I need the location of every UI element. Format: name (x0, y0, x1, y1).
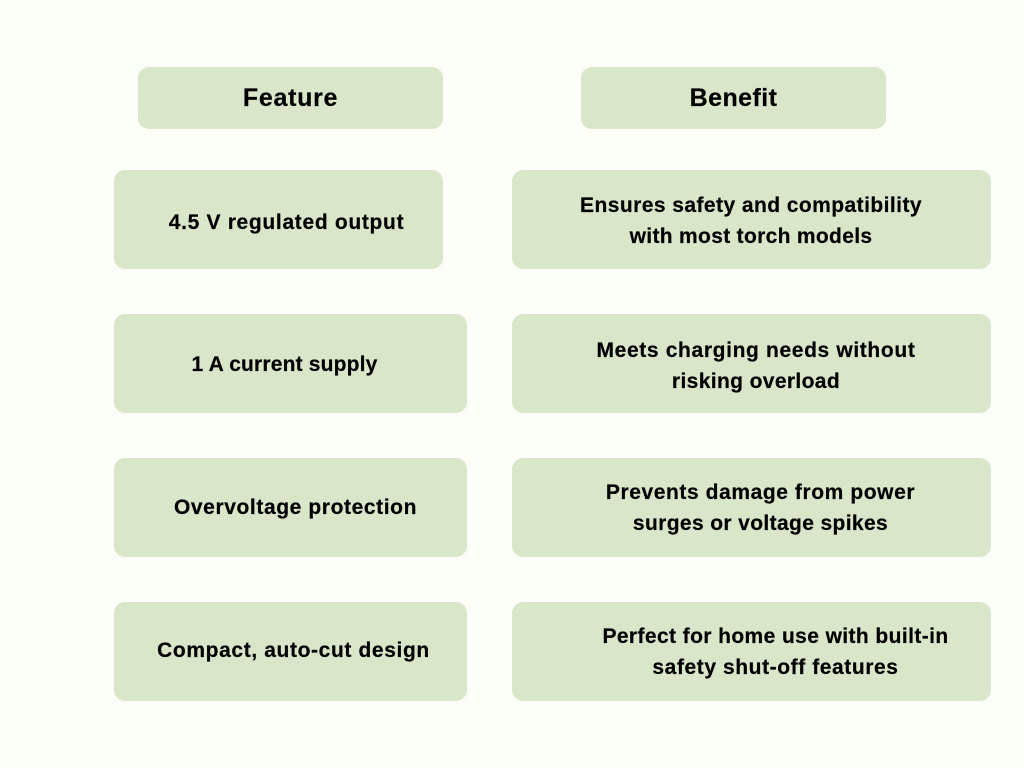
panel: benefit 2 (512, 314, 991, 413)
heading: benefit: Benefit (690, 84, 777, 112)
panel: benefit header (581, 67, 886, 129)
panel: benefit 4 (512, 602, 991, 701)
text: benefit 4: safety shut-off features (652, 656, 899, 679)
text: benefit 3 (606, 481, 915, 535)
text: benefit 2: Meets charging needs without (597, 339, 915, 362)
text: feature 4: Compact, auto-cut design (157, 639, 430, 662)
text: feature 3: Overvoltage protection (174, 496, 417, 519)
text: benefit 1 (580, 194, 922, 248)
text: benefit 3: Prevents damage from power (606, 481, 915, 504)
text: benefit 4: Perfect for home use with built-in (602, 625, 949, 648)
panel: feature header (138, 67, 443, 129)
text: feature 1: 4.5 V regulated output (169, 211, 404, 234)
panel: feature 4 (114, 602, 467, 701)
panel: benefit 1 (512, 170, 991, 269)
panel: feature 3 (114, 458, 467, 557)
text: benefit 2: risking overload (672, 370, 840, 393)
text: feature 2: 1 A current supply (192, 353, 377, 376)
panel: benefit 3 (512, 458, 991, 557)
heading: feature: Feature (243, 84, 338, 112)
text: benefit 4 (602, 625, 949, 679)
panel: feature 1 (114, 170, 443, 269)
panel: feature 2 (114, 314, 467, 413)
text: benefit 3: surges or voltage spikes (633, 512, 888, 535)
text: benefit 1: Ensures safety and compatibility (580, 194, 922, 217)
text: benefit 2 (597, 339, 915, 393)
text: benefit 1: with most torch models (630, 225, 872, 248)
